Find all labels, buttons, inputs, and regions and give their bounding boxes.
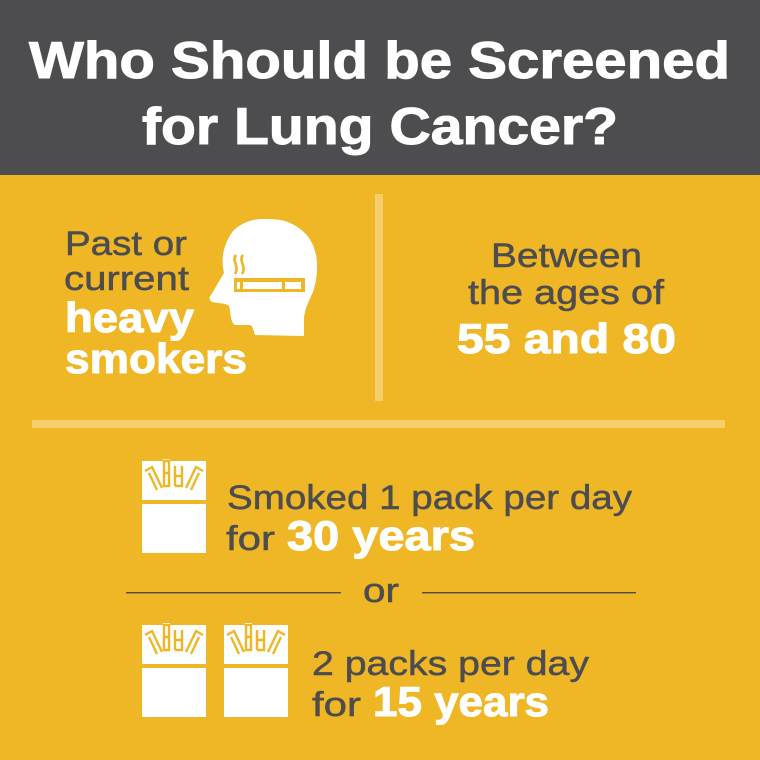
title: Who Should be Screened — [29, 32, 730, 90]
title — [29, 32, 730, 156]
icon: cigarette pack one — [142, 623, 206, 717]
icon: cigarette pack two — [224, 623, 288, 717]
icon: cigarette pack — [142, 459, 206, 553]
text: heavy smokers: smokers — [65, 335, 247, 382]
text: ages: the ages of — [468, 274, 665, 312]
text: 2 packs — [312, 645, 589, 725]
vertical divider — [375, 194, 383, 401]
text: 1 pack: for — [226, 520, 275, 558]
text: ages: 55 and 80 — [457, 315, 676, 362]
icon: head with cigarette — [210, 219, 317, 336]
text: heavy smokers — [64, 225, 247, 382]
text: heavy smokers: Past or — [65, 225, 187, 263]
text: heavy smokers: current — [64, 260, 190, 298]
text: 2 packs: 2 packs per day — [312, 645, 589, 683]
text: 1 pack: 30 years — [287, 512, 475, 559]
rule right — [422, 592, 636, 593]
text: 2 packs: for — [312, 686, 361, 724]
title: for Lung Cancer? — [142, 98, 618, 156]
header band — [0, 0, 760, 175]
horizontal divider — [32, 420, 725, 428]
text: ages — [457, 237, 676, 362]
text: ages: Between — [491, 237, 642, 275]
rule left — [126, 592, 341, 593]
text: 1 pack — [226, 479, 632, 559]
text: 1 pack: Smoked 1 pack per day — [227, 479, 632, 517]
or label: or — [363, 572, 399, 610]
text: 2 packs: 15 years — [373, 678, 549, 725]
text: heavy smokers: heavy — [65, 294, 195, 341]
